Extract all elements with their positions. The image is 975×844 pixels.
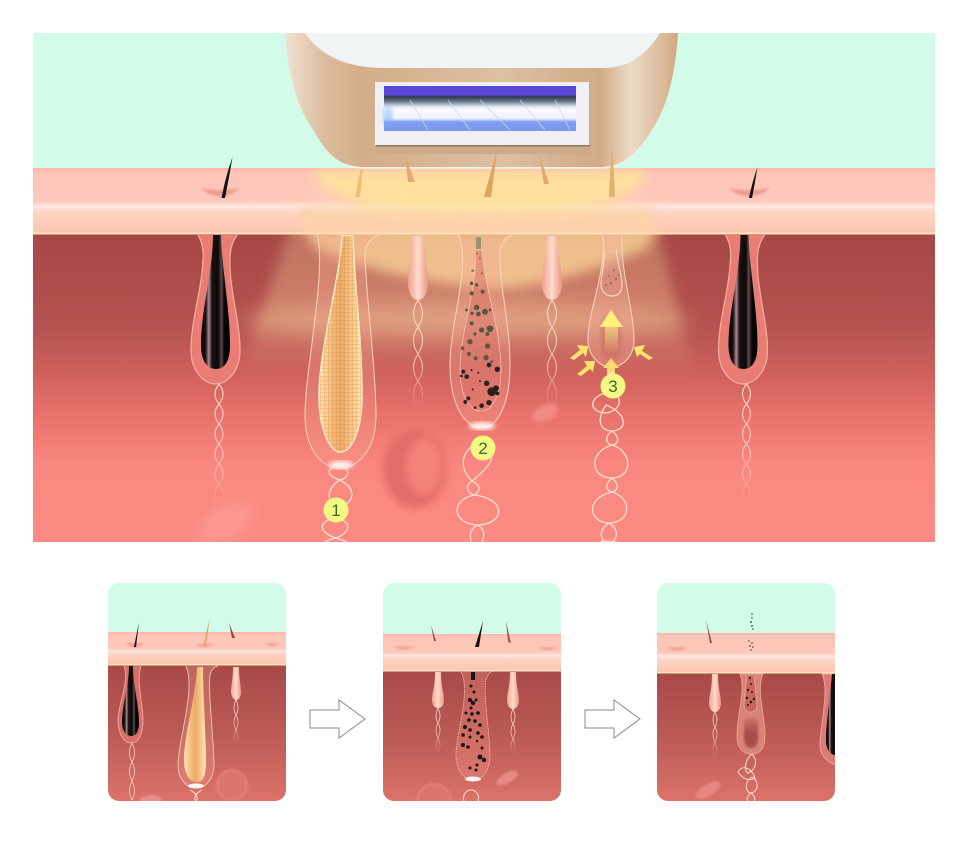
carbonised follicle xyxy=(456,621,494,806)
outer sheath xyxy=(305,234,382,468)
sheath xyxy=(178,666,218,788)
empty centre xyxy=(744,718,758,748)
helix xyxy=(738,754,757,806)
root xyxy=(122,666,139,736)
black hair follicle xyxy=(118,622,143,800)
arrow head solid xyxy=(600,310,623,327)
right small follicle xyxy=(506,621,519,754)
shaft 2 xyxy=(409,167,415,182)
helix xyxy=(130,743,134,800)
follicle: left black hair xyxy=(191,157,240,504)
small follicle xyxy=(229,623,241,745)
small follicle left xyxy=(408,236,428,408)
hair on device 1 xyxy=(405,152,413,182)
helix strand xyxy=(742,384,750,504)
inward arrow left lower xyxy=(577,361,595,376)
residual particles xyxy=(605,269,620,286)
root glow xyxy=(188,784,204,788)
sheath xyxy=(191,235,240,384)
window frame xyxy=(375,82,590,154)
sheath xyxy=(820,674,840,765)
hair on device 2 xyxy=(538,150,549,184)
small follicle right xyxy=(542,236,562,408)
inward arrow bottom xyxy=(603,358,619,378)
follicle: right black hair xyxy=(718,167,768,504)
beam cone xyxy=(249,234,688,362)
blood cell faint xyxy=(693,778,723,802)
outer sheath xyxy=(588,236,634,367)
inward arrow right xyxy=(634,345,653,360)
golden hair follicle xyxy=(178,617,218,804)
glow upper yellow xyxy=(312,170,648,212)
shaft 4 xyxy=(544,168,549,184)
inward arrow left upper xyxy=(570,345,588,360)
badge 2 xyxy=(470,436,496,460)
skin bright boundary line xyxy=(33,232,935,234)
root glow xyxy=(329,461,353,469)
floating hair fragments above skin xyxy=(748,613,754,651)
hair on device 4 xyxy=(609,138,615,197)
helix xyxy=(234,700,238,745)
skin surface layer xyxy=(33,168,935,234)
badge 2: 2 xyxy=(478,439,488,458)
root xyxy=(507,672,519,709)
light beam in dermis xyxy=(240,234,692,362)
helix strand xyxy=(215,384,223,504)
root xyxy=(231,667,241,700)
white top shell xyxy=(305,33,660,68)
up arrow shadow xyxy=(600,314,622,362)
blood cell lower xyxy=(417,784,451,818)
follicle 1: heated golden hair xyxy=(305,234,382,550)
blood cell xyxy=(217,770,247,800)
outer sheath xyxy=(450,234,515,428)
shaft xyxy=(431,625,436,641)
root glow xyxy=(465,776,481,782)
blood cell faint lower left xyxy=(203,504,250,540)
upper light band xyxy=(300,226,660,288)
hair on device 3 xyxy=(484,150,497,197)
shrunken hair bulb xyxy=(601,250,622,296)
up arrow xyxy=(600,310,623,353)
helix xyxy=(464,790,478,806)
shaft xyxy=(203,617,210,646)
gold casing xyxy=(285,33,678,167)
skin glow under device xyxy=(300,170,655,239)
shaft 3 xyxy=(484,167,495,196)
small root xyxy=(542,236,562,300)
helix xyxy=(713,712,717,757)
skin dimples xyxy=(125,643,280,648)
badge 1 xyxy=(324,498,348,522)
device: light treatment head xyxy=(285,33,678,197)
lamp blue band xyxy=(384,86,576,131)
arrow: stage 2 to stage 3 xyxy=(585,700,640,738)
helix strand xyxy=(457,444,499,552)
residual particles xyxy=(746,677,755,706)
blood cell large xyxy=(383,430,447,508)
sheath xyxy=(737,674,765,754)
lamp reflections xyxy=(410,100,570,130)
skin dimples xyxy=(393,646,559,650)
skin xyxy=(108,632,286,665)
helix strand xyxy=(318,468,355,550)
lower carbon particles xyxy=(460,363,500,409)
shaft 5 xyxy=(609,170,615,194)
light-coloured hair shafts in skin xyxy=(355,167,615,197)
dermis xyxy=(383,671,561,801)
golden hair root xyxy=(319,236,362,452)
helix xyxy=(511,709,515,754)
boundary line xyxy=(383,670,561,672)
black hair root xyxy=(201,235,230,369)
glow lower peach xyxy=(297,202,658,232)
boundary line xyxy=(657,672,835,674)
badge 3 xyxy=(600,374,626,398)
window lower shadow xyxy=(376,145,590,146)
right edge black hair xyxy=(820,674,840,765)
shaft xyxy=(506,621,511,643)
skin xyxy=(657,633,835,673)
panel: stage 3 thumbnail xyxy=(657,583,840,806)
sheath xyxy=(118,666,143,743)
helix strand xyxy=(414,300,422,408)
arrow: stage 1 to stage 2 xyxy=(310,700,365,738)
hair above skin xyxy=(749,167,758,198)
dermis layer xyxy=(33,234,935,542)
helix strand xyxy=(590,372,628,550)
shaft xyxy=(134,622,139,647)
small root xyxy=(408,236,428,300)
blood cell faint right xyxy=(532,402,558,423)
hair grid texture xyxy=(319,236,362,452)
root glow xyxy=(469,422,495,430)
sky xyxy=(657,583,835,633)
hair above skin xyxy=(222,157,232,198)
residual bulb xyxy=(744,676,757,712)
helix xyxy=(190,790,202,804)
badge 3: 3 xyxy=(608,377,618,396)
pale rim xyxy=(285,33,678,169)
root xyxy=(826,674,840,756)
sheath xyxy=(456,671,494,781)
inner root xyxy=(460,250,501,411)
lamp side glow xyxy=(383,106,393,126)
dermis xyxy=(657,673,835,801)
lower light band xyxy=(240,304,690,338)
emptied follicle xyxy=(737,613,765,806)
skin dimple xyxy=(666,647,688,651)
badge 1: 1 xyxy=(331,501,341,520)
panel: stage 2 thumbnail xyxy=(383,583,561,818)
follicle 2: carbonised hair xyxy=(450,234,515,552)
panel: stage 1 thumbnail xyxy=(108,583,286,805)
sky xyxy=(383,583,561,634)
helix xyxy=(436,708,440,753)
sky xyxy=(108,583,286,632)
helix strand xyxy=(548,300,556,408)
carbon particles xyxy=(461,672,486,772)
sky background above skin xyxy=(33,33,935,168)
upper carbon particles xyxy=(461,252,493,363)
root xyxy=(432,672,444,708)
skin xyxy=(383,634,561,671)
shaft 1 xyxy=(355,167,363,197)
shaft xyxy=(475,621,483,647)
shaft xyxy=(706,620,712,643)
skin surface dimples xyxy=(200,188,770,196)
blood cell right xyxy=(494,768,520,788)
sheath xyxy=(718,235,768,384)
left small follicle xyxy=(431,625,444,753)
root xyxy=(709,674,721,712)
panel: main skin cross-section diagram xyxy=(33,33,935,552)
shaft xyxy=(229,623,235,638)
dermis xyxy=(108,665,286,801)
faint cell bottom left xyxy=(140,795,162,805)
left small follicle xyxy=(706,620,721,757)
black hair root xyxy=(728,235,758,369)
hair stub xyxy=(476,237,481,249)
boundary line xyxy=(108,664,286,666)
follicle 3: hair shed and regrowth blocked xyxy=(570,236,653,550)
window interior xyxy=(375,82,589,145)
root xyxy=(184,667,206,782)
